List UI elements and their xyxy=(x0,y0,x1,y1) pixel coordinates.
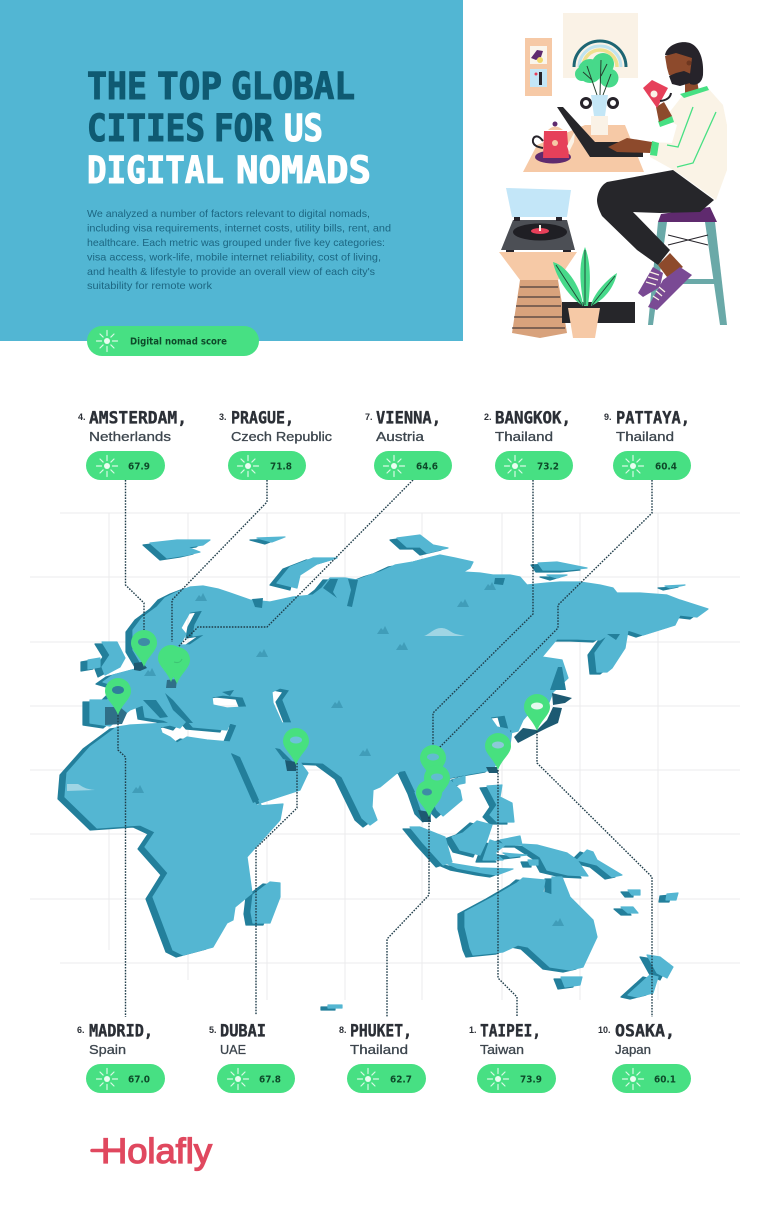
city card: Bangkok xyxy=(484,408,573,480)
city card: Madrid xyxy=(77,1022,165,1093)
city card: Osaka: 60.1 xyxy=(654,1074,676,1086)
city card: Madrid: 67.0 xyxy=(128,1074,150,1086)
connector lines xyxy=(118,480,652,1017)
title xyxy=(87,65,371,192)
teapot xyxy=(533,122,575,164)
city card: Vienna xyxy=(365,408,452,480)
coastal shading xyxy=(143,578,620,803)
title: GLOBAL xyxy=(231,65,355,108)
pin: Vienna xyxy=(164,647,190,684)
intro text: healthcare. Each metric was grouped under five key categories: xyxy=(87,237,385,249)
intro text xyxy=(87,208,391,292)
title: FOR xyxy=(214,107,274,150)
pin: Bangkok xyxy=(420,745,446,782)
city card: Amsterdam: AMSTERDAM, xyxy=(89,408,187,428)
wall art: small frame xyxy=(525,38,552,96)
city card: Pattaya: PATTAYA, xyxy=(616,408,690,428)
city card: Dubai: 67.8 xyxy=(259,1074,281,1086)
city card: Amsterdam: Netherlands xyxy=(89,429,172,444)
city card: Taipei: 73.9 xyxy=(520,1074,542,1086)
pin: Prague xyxy=(158,645,184,682)
vase with plant xyxy=(575,53,618,135)
city card: Vienna: 7. xyxy=(365,412,373,422)
city card: Phuket: PHUKET, xyxy=(350,1022,412,1040)
legend: digital nomad score: Digital nomad score xyxy=(130,336,227,348)
title: CITIES xyxy=(87,107,205,150)
title: US xyxy=(284,107,323,150)
pin: Amsterdam xyxy=(131,630,157,667)
city card: Prague: 71.8 xyxy=(270,462,292,472)
title: THE xyxy=(87,65,147,108)
city card: Pattaya xyxy=(604,408,691,480)
city card: Bangkok: 2. xyxy=(484,412,492,422)
intro text: We analyzed a number of factors relevant to digital nomads, xyxy=(87,208,370,220)
pin: Taipei xyxy=(485,733,511,770)
city card: Bangkok: 73.2 xyxy=(537,462,559,472)
city card: Osaka xyxy=(598,1022,691,1093)
pin: Osaka xyxy=(524,694,550,731)
highlighted countries and Japan xyxy=(105,662,572,822)
city card: Vienna: 64.6 xyxy=(416,462,438,472)
city card: Taipei: TAIPEI, xyxy=(480,1022,541,1040)
pin: Pattaya xyxy=(424,765,450,802)
map pins xyxy=(105,630,550,817)
city card: Amsterdam: 4. xyxy=(78,412,86,422)
intro text: suitability for remote work xyxy=(87,280,213,292)
city card: Osaka: 10. xyxy=(598,1025,611,1035)
intro text: visa access, work-life, mobile internet reliability, cost of living, xyxy=(87,252,381,264)
city card: Dubai xyxy=(209,1022,295,1093)
pin: Phuket xyxy=(416,780,442,817)
title: TOP xyxy=(157,65,222,108)
potted plant xyxy=(553,247,617,338)
title: DIGITAL xyxy=(87,149,224,192)
city card: Vienna: Austria xyxy=(376,429,425,444)
city card: Taipei: 1. xyxy=(469,1025,477,1035)
illustration: digital nomad working at a desk xyxy=(499,13,727,338)
city card: Prague: 3. xyxy=(219,412,227,422)
pin: Madrid xyxy=(105,678,131,715)
title: NOMADS xyxy=(236,149,371,192)
intro text: including visa requirements, internet costs, utility bills, rent, and xyxy=(87,222,391,234)
wall art: rainbow xyxy=(563,13,638,78)
city card: Pattaya: 9. xyxy=(604,412,612,422)
mountains and clouds xyxy=(132,582,564,926)
city card: Amsterdam: 67.9 xyxy=(128,462,150,472)
city card: Pattaya: Thailand xyxy=(616,429,674,444)
black box xyxy=(562,302,635,323)
city card: Prague: PRAGUE, xyxy=(231,408,294,428)
city card: Madrid: MADRID, xyxy=(89,1022,153,1040)
logo: Holafly: Holafly xyxy=(101,1132,213,1171)
city card: Madrid: 6. xyxy=(77,1025,85,1035)
city card: Osaka: Japan xyxy=(615,1042,651,1057)
laptop xyxy=(557,107,643,157)
legend: digital nomad score xyxy=(87,326,259,356)
city card: Taipei xyxy=(469,1022,556,1093)
city card: Phuket: 8. xyxy=(339,1025,347,1035)
city card: Phuket: Thailand xyxy=(350,1042,408,1057)
city card: Amsterdam xyxy=(78,408,187,480)
city card: Vienna: VIENNA, xyxy=(376,408,441,428)
city card: Taipei: Taiwan xyxy=(480,1042,524,1057)
map grid xyxy=(30,513,740,1000)
panel: header xyxy=(0,0,463,341)
table xyxy=(523,125,644,172)
intro text: and health & lifestyle to provide an overall view of each city's xyxy=(87,266,375,278)
city card: Dubai: DUBAI xyxy=(220,1022,266,1040)
pin: Dubai xyxy=(283,728,309,765)
city card: Prague xyxy=(219,408,333,480)
city card: Phuket xyxy=(339,1022,426,1093)
city card: Phuket: 62.7 xyxy=(390,1074,412,1086)
city card: Dubai: 5. xyxy=(209,1025,217,1035)
record player xyxy=(501,188,575,254)
side table xyxy=(499,252,577,338)
world map xyxy=(58,535,708,1010)
man xyxy=(597,42,727,310)
city card: Madrid: Spain xyxy=(89,1042,126,1057)
city card: Bangkok: BANGKOK, xyxy=(495,408,571,428)
city card: Pattaya: 60.4 xyxy=(655,462,677,472)
stool xyxy=(648,207,727,325)
city card: Prague: Czech Republic xyxy=(231,429,333,444)
city card: Osaka: OSAKA, xyxy=(615,1022,675,1040)
city card: Bangkok: Thailand xyxy=(495,429,553,444)
city card: Dubai: UAE xyxy=(220,1042,246,1057)
